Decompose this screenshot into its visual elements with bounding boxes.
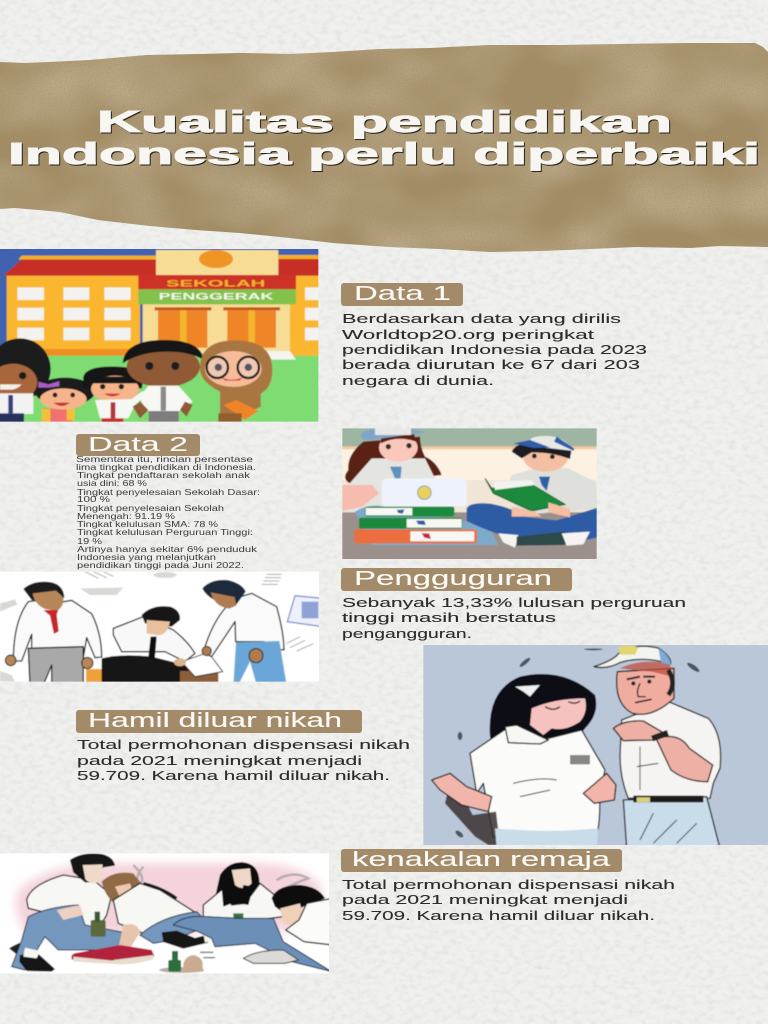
- text: Data 2 body: Tingkat penyelesaian Sekolah Dasar:: [77, 487, 260, 497]
- heading: Hamil diluar nikah: [76, 710, 362, 733]
- text: Data 2 body: Tingkat pendaftaran sekolah anak: [77, 470, 251, 480]
- bottles: [159, 967, 204, 973]
- heading: Hamil diluar nikah: Hamil diluar nikah: [88, 710, 342, 732]
- text: Data 1 body: Worldtop20.org peringkat: [342, 327, 595, 342]
- heading: Data 2: [76, 434, 200, 456]
- text: Data 1 body: [342, 311, 647, 388]
- first boy: [8, 942, 21, 954]
- text: Data 2 body: 100 %: [77, 494, 110, 504]
- heading: kenakalan remaja: kenakalan remaja: [352, 849, 611, 871]
- text: Data 2 body: 19 %: [77, 536, 102, 546]
- sign text: [159, 278, 274, 302]
- document: [287, 596, 322, 627]
- illustration: teenagers drinking and smoking: [0, 850, 332, 977]
- text: Data 2 body: Sementara itu, rincian persentase: [76, 454, 253, 464]
- boy left: [0, 338, 51, 400]
- text: Hamil diluar nikah body: pada 2021 meningkat menjadi: [77, 753, 362, 768]
- girl small: [43, 408, 73, 425]
- text: Pengguguran body: tinggi masih berstatus: [342, 610, 557, 625]
- girl: [490, 674, 596, 742]
- text: Hamil diluar nikah body: 59.709. Karena hamil diluar nikah.: [77, 768, 390, 783]
- teacher hijab: [200, 340, 272, 422]
- text: Data 1 body: Berdasarkan data yang dirilis: [342, 311, 622, 326]
- text: Pengguguran body: [342, 595, 686, 641]
- text: Data 1 body: berada diurutan ke 67 dari 203: [342, 357, 640, 372]
- text: Pengguguran body: Sebanyak 13,33% lulusan perguruan: [342, 595, 686, 610]
- text: Data 2 body: Tingkat kelulusan SMA: 78 %: [77, 519, 218, 529]
- torn kraft paper banner: [0, 43, 768, 252]
- girl: [345, 437, 442, 485]
- man right: [203, 593, 284, 657]
- heading: Pengguguran: Pengguguran: [354, 568, 552, 590]
- text: Data 1 body: negara di dunia.: [342, 373, 494, 388]
- heading: Data 1: [341, 283, 463, 306]
- heading: Pengguguran: [341, 568, 572, 591]
- heading: Data 2: Data 2: [88, 434, 188, 456]
- title: Indonesia perlu diperbaiki: [8, 136, 760, 171]
- text: Data 2 body: Indonesia yang melanjutkan: [77, 552, 216, 562]
- girl: [215, 862, 260, 905]
- fourth boy: [272, 885, 325, 915]
- illustration: sekolah penggerak school and children: [0, 246, 322, 425]
- text: Data 2 body: usia dini: 68 %: [77, 478, 147, 488]
- text: Hamil diluar nikah body: Total permohonan dispensasi nikah: [77, 737, 410, 752]
- seated man: [85, 668, 103, 682]
- man left: [13, 600, 102, 661]
- illustration: pregnant student and boy: [420, 642, 768, 848]
- text: Hamil diluar nikah body: [77, 737, 410, 783]
- boy tall: [126, 350, 201, 386]
- title: [8, 104, 760, 171]
- boy: [620, 702, 721, 798]
- text: Data 2 body: Tingkat penyelesaian Sekolah: [77, 503, 224, 513]
- text: Data 2 body: pendidikan tinggi pada Juni 2022.: [77, 560, 244, 570]
- text: Data 2 body: Artinya hanya sekitar 6% penduduk: [77, 544, 258, 554]
- text: Data 2 body: Menengah: 91.19 %: [77, 511, 175, 521]
- text: Data 2 body: lima tingkat pendidikan di Indonesia.: [76, 462, 256, 472]
- text: Pengguguran body: pengangguran.: [342, 626, 472, 641]
- text: kenakalan remaja body: pada 2021 meningkat menjadi: [342, 892, 628, 907]
- title: Kualitas pendidikan: [97, 104, 672, 139]
- illustration: discouraged unemployed graduates: [0, 568, 322, 685]
- text: kenakalan remaja body: [342, 877, 675, 923]
- illustration: students reading with books: [339, 425, 600, 562]
- sign text: PENGGERAK: [159, 292, 274, 302]
- text: kenakalan remaja body: Total permohonan dispensasi nikah: [342, 877, 675, 892]
- heading: Data 1: Data 1: [354, 283, 451, 305]
- text: kenakalan remaja body: 59.709. Karena hamil diluar nikah.: [342, 908, 655, 923]
- text: Data 2 body: Tingkat kelulusan Perguruan Tinggi:: [77, 527, 253, 537]
- text: Data 1 body: pendidikan Indonesia pada 2023: [342, 342, 647, 357]
- boy: [510, 468, 596, 514]
- girl mid: [83, 367, 143, 388]
- heading: kenakalan remaja: [341, 849, 622, 872]
- text: Data 2 body: [76, 454, 260, 570]
- second, leaning: [101, 872, 140, 902]
- books: [365, 507, 454, 517]
- sign text: SEKOLAH: [166, 278, 266, 288]
